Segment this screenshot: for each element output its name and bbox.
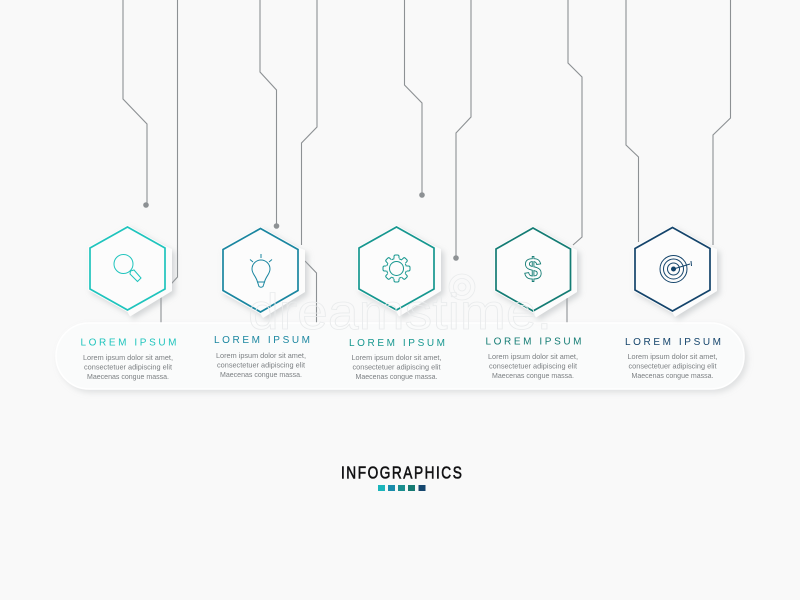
- step 5 text: Lorem ipsum dolor sit amet,: [628, 352, 718, 361]
- step 3: hexagon with gear: [357, 225, 441, 316]
- step 2 text: LOREM IPSUM: [214, 335, 310, 346]
- step 5 text: Maecenas congue massa.: [632, 371, 714, 380]
- icon: magnifier: [114, 254, 141, 282]
- step 4 text: Maecenas congue massa.: [492, 371, 574, 380]
- step 3 text: Maecenas congue massa.: [356, 372, 438, 381]
- step 1: hexagon with magnifier: [88, 225, 172, 316]
- step 5: hexagon with target: [633, 226, 717, 317]
- color squares: [378, 485, 426, 491]
- step 2 text: [214, 335, 310, 379]
- step 1 text: Maecenas congue massa.: [87, 372, 169, 381]
- icon: gear: [383, 255, 410, 282]
- icon: dollar: $: [524, 251, 542, 286]
- step 2 text: consectetuer adipiscing elit: [217, 360, 306, 370]
- step 4 text: LOREM IPSUM: [486, 336, 582, 348]
- step 2 text: Maecenas congue massa.: [220, 370, 302, 379]
- step 2 text: Lorem ipsum dolor sit amet,: [216, 351, 306, 360]
- watermark: dreamstime.: [248, 284, 552, 340]
- icon: target: [660, 256, 692, 282]
- title: INFOGRAPHICS: [341, 464, 462, 483]
- icon: light bulb: [250, 254, 272, 287]
- bottom text pill: [56, 323, 744, 389]
- step 1 text: [80, 338, 176, 381]
- step 4 text: consectetuer adipiscing elit: [489, 362, 578, 370]
- step 1 text: Lorem ipsum dolor sit amet,: [83, 353, 173, 362]
- step 2: hexagon with light bulb: [221, 226, 305, 318]
- step 4: hexagon with dollar sign: [494, 226, 577, 318]
- step 3 text: LOREM IPSUM: [349, 338, 445, 349]
- step 1 text: LOREM IPSUM: [80, 338, 176, 348]
- step 3 text: consectetuer adipiscing elit: [352, 362, 441, 372]
- step 3 text: Lorem ipsum dolor sit amet,: [352, 353, 442, 362]
- step 4 text: Lorem ipsum dolor sit amet,: [488, 352, 578, 361]
- step 5 text: LOREM IPSUM: [625, 337, 721, 348]
- step 5 text: consectetuer adipiscing elit: [628, 362, 717, 370]
- step 4 text: [486, 336, 582, 380]
- step 1 text: consectetuer adipiscing elit: [84, 362, 173, 372]
- step 5 text: [625, 337, 721, 380]
- connector end dots: [143, 192, 459, 261]
- connector lines: [123, 0, 730, 323]
- step 3 text: [349, 338, 445, 381]
